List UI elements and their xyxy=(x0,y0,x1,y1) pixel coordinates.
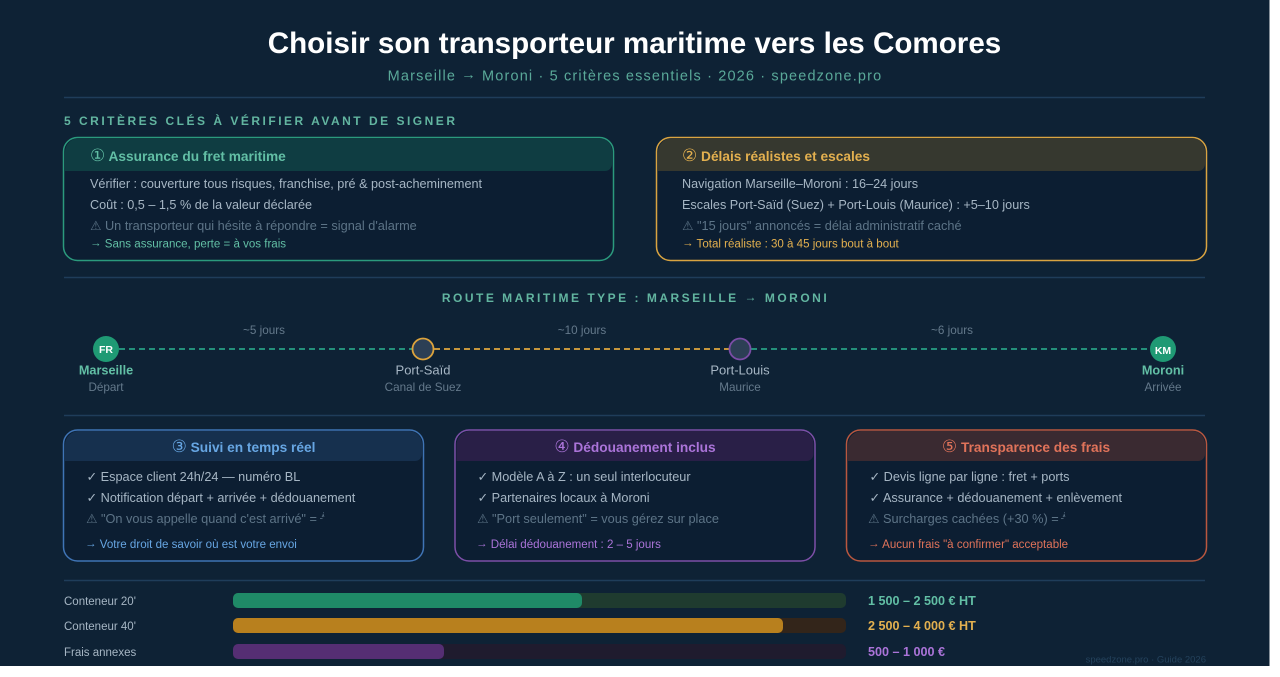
cost bar: conteneur 40 xyxy=(64,618,976,633)
warning: assurance: ⚠ Un transporteur qui hésite à répondre = signal d'alarme xyxy=(90,218,417,233)
stop: Port-Saïd: Canal de Suez xyxy=(385,381,461,394)
section heading: criteria: 5 CRITÈRES CLÉS À VÉRIFIER AVANT DE SIGNER xyxy=(64,113,457,128)
route segment: Port-Saïd to Port-Louis xyxy=(434,348,729,350)
heading: délais: ② Délais réalistes et escales xyxy=(682,146,870,165)
cost bar: conteneur 20: Conteneur 20' xyxy=(64,596,136,608)
conclusion: dédouanement: → xyxy=(476,538,488,550)
panel: délais xyxy=(656,138,1206,260)
text: assurance details: Vérifier : couverture tous risques, franchise, pré & post-acheminement xyxy=(90,177,483,191)
stop: Moroni: Arrivée xyxy=(1144,381,1182,394)
subtitle: Marseille xyxy=(388,68,456,84)
subtitle: → xyxy=(461,67,477,83)
conclusion: dédouanement: Délai dédouanement : 2 – 5 jours xyxy=(488,539,661,551)
checklist: suivi: ✓ Notification départ + arrivée + dédouanement xyxy=(86,491,356,505)
panel: délais: Escales Port-Saïd (Suez) + Port-Louis (Maurice) : +5–10 jours xyxy=(682,198,1030,212)
subtitle: Moroni · 5 critères essentiels · 2026 · speedzone.pro xyxy=(477,68,882,84)
stop: Moroni: Moroni xyxy=(1142,364,1184,378)
duration labels xyxy=(243,324,973,337)
conclusion: suivi: Votre droit de savoir où est votre envoi xyxy=(97,539,297,551)
panel: transparence xyxy=(846,430,1206,561)
stop: Port-Louis: Port-Louis xyxy=(710,362,770,378)
conclusion: assurance: Sans assurance, perte = à vos frais xyxy=(102,238,286,250)
stop: Port-Louis xyxy=(710,338,770,394)
panel: assurance xyxy=(64,138,614,260)
conclusion: transparence: Aucun frais "à confirmer" acceptable xyxy=(880,539,1068,551)
checklist: suivi: ✓ Espace client 24h/24 — numéro BL xyxy=(86,470,300,484)
stop: Port-Louis: Maurice xyxy=(719,381,761,394)
checklist: transparence: ✓ Assurance + dédouanement + enlèvement xyxy=(870,491,1123,505)
conclusion: transparence: → xyxy=(868,538,880,550)
text: délais details: Navigation Marseille–Moroni : 16–24 jours xyxy=(682,177,918,191)
stop: Port-Saïd xyxy=(385,338,461,394)
cost bar: conteneur 40: Conteneur 40' xyxy=(64,621,136,633)
duration labels: ~6 jours xyxy=(931,324,973,337)
cost bar: conteneur 40: 2 500 – 4 000 € HT xyxy=(868,619,976,633)
checklist: dédouanement xyxy=(478,470,691,505)
conclusion: délais: → xyxy=(682,238,694,250)
section heading: route: → xyxy=(744,290,759,304)
conclusion: assurance: → xyxy=(90,238,102,250)
stop: Marseille xyxy=(79,336,133,394)
route segment: Port-Louis to Moroni xyxy=(751,348,1150,350)
cost bar: conteneur 20 xyxy=(64,593,976,608)
stop: Moroni: KM xyxy=(1155,345,1171,357)
stop: Marseille: Départ xyxy=(88,381,124,394)
route segment: Marseille to Port-Saïd xyxy=(119,348,412,350)
cost bar: frais annexes xyxy=(64,644,945,659)
cost bar: frais annexes: Frais annexes xyxy=(64,647,136,659)
heading: transparence: ⑤ Transparence des frais xyxy=(942,437,1110,456)
checklist: dédouanement: ✓ Partenaires locaux à Moroni xyxy=(478,491,650,505)
route diagram xyxy=(79,324,1184,394)
warning: suivi: ⚠ "On vous appelle quand c'est arrivé" = xyxy=(86,511,317,526)
section heading: route: MORONI xyxy=(759,291,829,305)
warning: délais: ⚠ "15 jours" annoncés = délai administratif caché xyxy=(682,218,962,233)
cost bar: conteneur 20: 1 500 – 2 500 € HT xyxy=(868,594,976,608)
stop: Port-Saïd: Port-Saïd xyxy=(396,362,450,378)
footer credit: speedzone.pro · Guide 2026 xyxy=(1086,654,1206,666)
warning: transparence: ⚠ Surcharges cachées (+30 %) = xyxy=(868,511,1059,526)
conclusion: délais: Total réaliste : 30 à 45 jours bout à bout xyxy=(694,238,900,250)
heading: dédouanement: ④ Dédouanement inclus xyxy=(554,437,716,456)
stop: Moroni xyxy=(1142,336,1184,394)
title: Choisir son transporteur maritime vers les Comores xyxy=(268,27,1001,60)
panel: suivi xyxy=(64,430,424,561)
cost bar: frais annexes: 500 – 1 000 € xyxy=(868,645,945,659)
checklist: dédouanement: ✓ Modèle A à Z : un seul interlocuteur xyxy=(478,470,691,484)
heading: suivi: ③ Suivi en temps réel xyxy=(172,437,315,456)
checklist: suivi xyxy=(86,470,356,505)
checklist: transparence xyxy=(870,470,1123,505)
panel: dédouanement xyxy=(455,430,815,561)
duration labels: ~5 jours xyxy=(243,324,285,337)
stop: Marseille: FR xyxy=(99,344,113,356)
duration labels: ~10 jours xyxy=(558,324,606,337)
warning: dédouanement: ⚠ "Port seulement" = vous gérez sur place xyxy=(477,511,719,526)
panel: assurance: Coût : 0,5 – 1,5 % de la valeur déclarée xyxy=(90,198,312,212)
checklist: transparence: ✓ Devis ligne par ligne : fret + ports xyxy=(870,470,1069,484)
heading: assurance: ① Assurance du fret maritime xyxy=(90,146,286,165)
conclusion: suivi: → xyxy=(85,538,97,550)
section heading: route: ROUTE MARITIME TYPE : MARSEILLE xyxy=(442,291,739,305)
stop: Marseille: Marseille xyxy=(79,364,133,378)
